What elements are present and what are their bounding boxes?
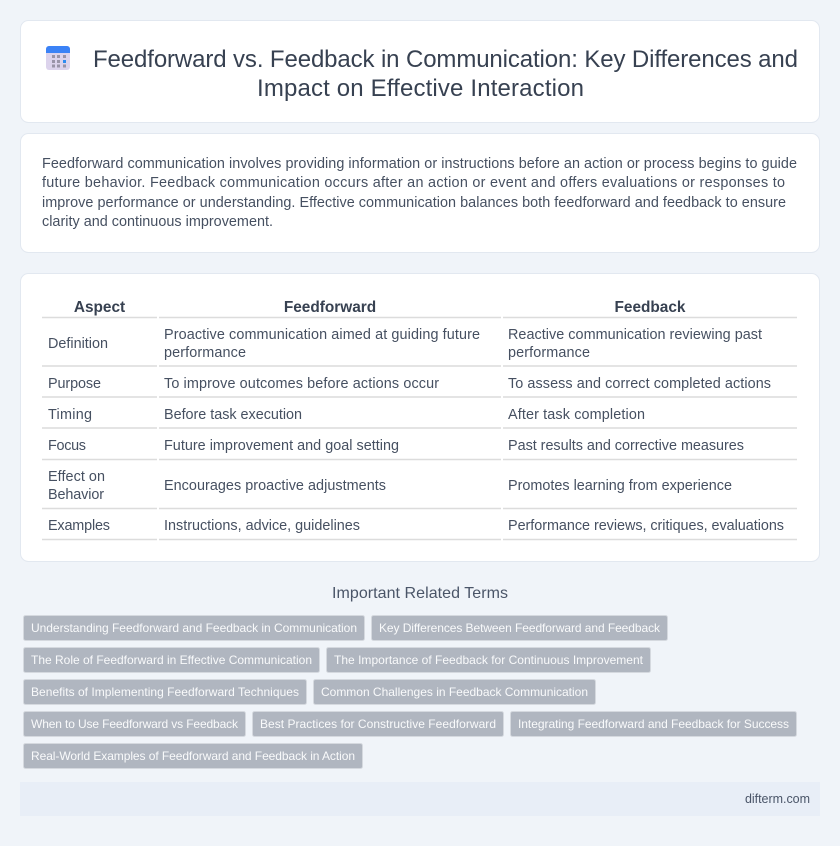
- heading: important related terms: Important Related Terms: [332, 585, 508, 602]
- tag: Benefits of Implementing Feedforward Techniques: [31, 685, 299, 699]
- title: [93, 46, 798, 102]
- tag: The Role of Feedforward in Effective Communication: [31, 653, 312, 667]
- row: effect on behavior: Encourages proactive adjustments: [164, 478, 386, 494]
- row: effect on behavior: Effect on: [48, 469, 105, 485]
- row: focus: Future improvement and goal setting: [164, 438, 399, 454]
- tag: Real-World Examples of Feedforward and Feedback in Action: [31, 749, 355, 763]
- tag: [24, 648, 320, 672]
- text block: introduction paragraph: clarity and continuous improvement.: [42, 214, 273, 230]
- table header row: [74, 299, 686, 316]
- tag: [24, 616, 364, 640]
- footer: site name: difterm.com: [745, 792, 810, 806]
- tag: [24, 680, 306, 704]
- row: definition: performance: [164, 345, 246, 361]
- tag: Integrating Feedforward and Feedback for Success: [518, 717, 789, 731]
- text block: introduction paragraph: Feedforward communication involves providing information or instructions before an action or process begins to guide: [42, 156, 797, 172]
- table header row: Feedback: [614, 299, 686, 316]
- row: timing: After task completion: [508, 407, 645, 423]
- panel: introduction: [20, 134, 820, 252]
- tag: [24, 744, 362, 768]
- tag: Understanding Feedforward and Feedback in Communication: [31, 621, 357, 635]
- tag list: related terms: [24, 616, 796, 768]
- row: definition: performance: [508, 345, 590, 361]
- row: focus: Focus: [48, 438, 86, 454]
- row: timing: [48, 407, 645, 423]
- panel: comparison table: [20, 274, 820, 562]
- row: examples: Performance reviews, critiques, evaluations: [508, 518, 784, 534]
- icon: calendar: [46, 46, 70, 70]
- row: focus: Past results and corrective measures: [508, 438, 744, 454]
- title: Feedforward vs. Feedback in Communication: Key Differences and: [93, 46, 798, 73]
- panel: title header: [20, 20, 820, 122]
- table header row: Feedforward: [284, 299, 376, 316]
- row: definition: Definition: [48, 336, 108, 352]
- row: timing: Before task execution: [164, 407, 302, 423]
- row: examples: Examples: [48, 518, 110, 534]
- footer: [20, 782, 820, 816]
- text block: introduction paragraph: [42, 156, 797, 230]
- tag: When to Use Feedforward vs Feedback: [31, 717, 239, 731]
- row: timing: Timing: [48, 407, 92, 423]
- row: focus: [48, 438, 744, 454]
- tag: Common Challenges in Feedback Communication: [321, 685, 588, 699]
- tag: The Importance of Feedback for Continuous Improvement: [334, 653, 644, 667]
- tag: [252, 712, 504, 736]
- row: examples: Instructions, advice, guidelines: [164, 518, 360, 534]
- table header row: Aspect: [74, 299, 125, 316]
- tag: [314, 680, 596, 704]
- row: purpose: To improve outcomes before actions occur: [164, 376, 439, 392]
- row: definition: [48, 327, 762, 361]
- row: examples: [48, 518, 784, 534]
- title: Impact on Effective Interaction: [257, 75, 584, 102]
- row: effect on behavior: Behavior: [48, 487, 104, 503]
- row: definition: Proactive communication aimed at guiding future: [164, 327, 480, 343]
- row: purpose: Purpose: [48, 376, 101, 392]
- row: effect on behavior: Promotes learning from experience: [508, 478, 732, 494]
- tag: [24, 712, 246, 736]
- row: definition: Reactive communication reviewing past: [508, 327, 762, 343]
- text block: introduction paragraph: future behavior. Feedback communication occurs after an action or event and offers evaluations or responses to: [42, 175, 785, 191]
- tag: [326, 648, 650, 672]
- row: purpose: To assess and correct completed actions: [508, 376, 771, 392]
- row: effect on behavior: [48, 469, 732, 503]
- tag: Best Practices for Constructive Feedforward: [260, 717, 496, 731]
- text block: introduction paragraph: improve performance or understanding. Effective communication balances both feedforward and feedback to ensure: [42, 195, 786, 211]
- tag: [510, 712, 796, 736]
- row: purpose: [48, 376, 771, 392]
- tag: [372, 616, 668, 640]
- tag: Key Differences Between Feedforward and Feedback: [379, 621, 661, 635]
